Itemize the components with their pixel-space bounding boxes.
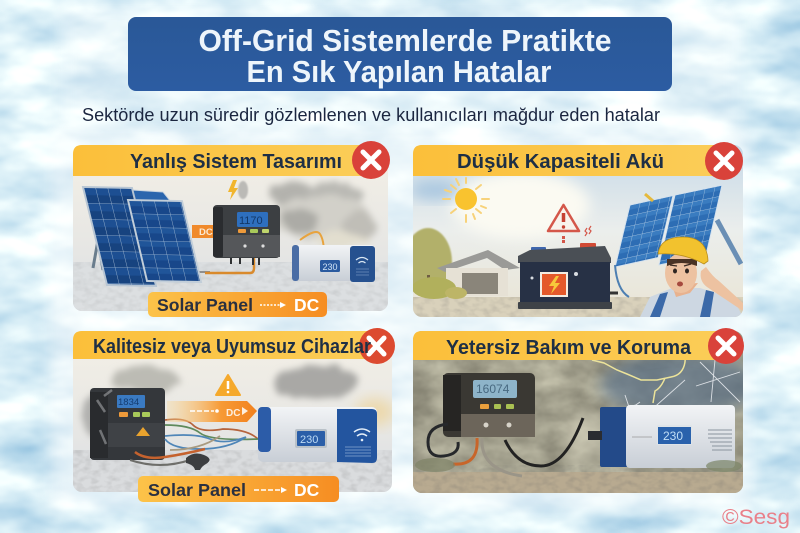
inverter box	[588, 405, 735, 468]
title banner	[128, 17, 672, 91]
charge controller	[213, 205, 280, 265]
icon: red X	[705, 142, 743, 180]
panel: Yetersiz Bakım ve Koruma	[413, 328, 760, 493]
heading: Düşük Kapasiteli Akü	[457, 150, 664, 173]
subtitle: Sektörde uzun süredir gözlemlenen ve kullanıcıları mağdur eden hatalar	[82, 104, 660, 125]
weathered controller: 16074	[476, 382, 510, 396]
inverter box: 230	[322, 262, 338, 272]
panel: Kalitesiz veya Uyumsuz Cihazlar	[73, 328, 395, 502]
icon: red X	[352, 141, 390, 179]
illustration: burnt controller, tangled wires, inverter	[73, 356, 392, 492]
DC tag	[192, 225, 213, 238]
inverter box: 230	[663, 429, 683, 443]
illustration: sun, house, battery, solar panels and worker	[404, 145, 743, 317]
icon: red X	[708, 328, 744, 364]
cobwebs	[624, 360, 740, 406]
header bar	[413, 145, 724, 176]
panel: Düşük Kapasiteli Akü	[404, 142, 743, 317]
icon: red X	[359, 328, 395, 364]
icon: warning triangle	[548, 205, 591, 244]
illustration: solar panels, controller, smoke and inverter	[73, 168, 388, 311]
charge controller: 1170	[239, 215, 263, 227]
label: Solar Panel to DC	[148, 292, 327, 317]
battery	[518, 243, 618, 309]
label: Solar Panel to DC: DC	[294, 480, 320, 500]
cables	[428, 418, 583, 476]
heading: Yetersiz Bakım ve Koruma	[446, 336, 692, 359]
icon: warning triangle	[216, 375, 240, 395]
burnt controller	[90, 388, 165, 460]
label: Solar Panel to DC: Solar Panel	[148, 480, 246, 500]
label: Solar Panel to DC: Solar Panel	[157, 295, 253, 315]
title text line 2: En Sık Yapılan Hatalar	[246, 55, 552, 89]
header bar	[73, 145, 372, 176]
watermark: ©Sesg	[722, 506, 790, 529]
DC tag: DC	[199, 227, 213, 238]
illustration: weathered controller, lightning, cobwebs and inverter	[413, 331, 760, 493]
plug	[186, 454, 210, 470]
DC arrow	[167, 401, 257, 422]
panel: Yanlış Sistem Tasarımı	[73, 141, 390, 317]
burnt controller: 1834	[118, 397, 139, 408]
weathered controller	[443, 373, 535, 437]
heading: Yanlış Sistem Tasarımı	[130, 150, 342, 173]
inverter box	[292, 245, 375, 282]
title text line 1: Off-Grid Sistemlerde Pratikte	[198, 24, 612, 58]
label: Solar Panel to DC: DC	[294, 295, 320, 315]
DC arrow: DC	[226, 408, 240, 419]
wires	[130, 419, 258, 465]
inverter box	[258, 407, 377, 463]
icon: sun	[443, 178, 489, 222]
worker	[640, 237, 743, 317]
header bar	[413, 331, 726, 360]
header bar	[73, 331, 378, 359]
heading: Kalitesiz veya Uyumsuz Cihazlar	[93, 336, 371, 358]
label: Solar Panel to DC	[138, 476, 339, 502]
inverter box: 230	[300, 434, 318, 446]
lightning	[592, 360, 686, 404]
